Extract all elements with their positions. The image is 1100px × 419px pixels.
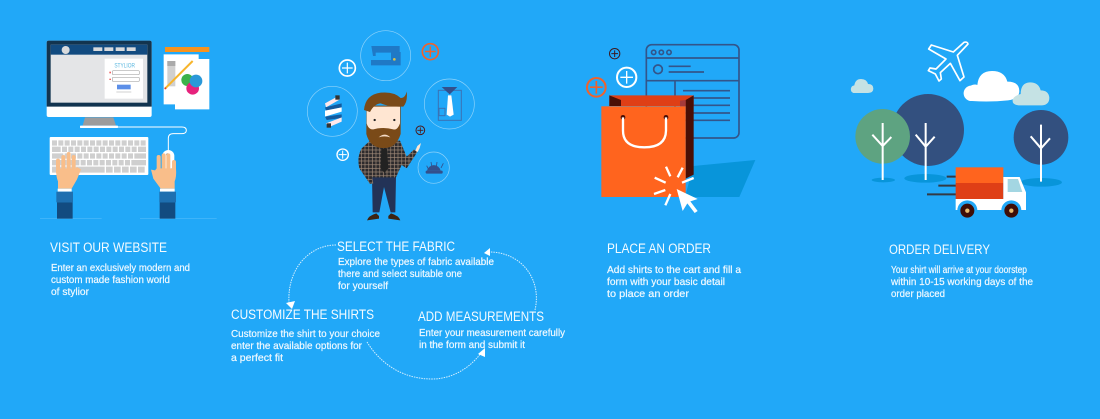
- icon: right hand and sleeve: [151, 155, 176, 219]
- floor lines: [40, 218, 217, 220]
- icon: plus white small: [337, 149, 348, 160]
- text block: visit our website: VISIT OUR WEBSITE: [50, 240, 167, 255]
- icon: tree green: [855, 109, 910, 182]
- text block: customize the shirts: a perfect fit: [231, 352, 283, 364]
- icon: shopping bag: [601, 95, 694, 197]
- text block: select the fabric: there and select suitable one: [338, 268, 462, 280]
- text block: add measurements: ADD MEASUREMENTS: [418, 309, 544, 324]
- text block: add measurements: in the form and submit it: [419, 339, 525, 351]
- icon: computer mouse: [162, 150, 174, 169]
- icon: keyboard: [50, 137, 148, 175]
- text block: customize the shirts: [231, 307, 380, 364]
- text block: place an order: Add shirts to the cart and fill a: [607, 264, 741, 276]
- character: bearded man: [358, 91, 421, 220]
- icon: pin cushion: [418, 152, 449, 183]
- text block: order delivery: within 10-15 working days of the: [890, 276, 1033, 288]
- icon: delivery truck: [927, 167, 1026, 218]
- text block: customize the shirts: enter the available options for: [231, 340, 362, 352]
- illustration: delivery truck and landscape: [851, 42, 1068, 218]
- text block: add measurements: [418, 309, 566, 351]
- text block: customize the shirts: Customize the shirt to your choice: [231, 328, 380, 340]
- illustration: tailor with fabric icons: [307, 31, 474, 220]
- text block: select the fabric: for yourself: [338, 280, 388, 292]
- icon: sewing machine: [361, 31, 411, 81]
- icon: tree dark right: [1014, 110, 1068, 187]
- icon: plus orange: [422, 44, 438, 60]
- icon: click burst: [654, 167, 694, 205]
- icon: plus dark: [416, 126, 425, 135]
- icon: plus white large: [339, 60, 355, 76]
- arrow: fabric to customize: [286, 245, 336, 309]
- illustration: computer and hands: [40, 41, 217, 219]
- text block: select the fabric: SELECT THE FABRIC: [337, 239, 455, 254]
- icon: left hand and sleeve: [56, 154, 81, 219]
- text block: customize the shirts: CUSTOMIZE THE SHIRTS: [231, 307, 374, 322]
- text block: add measurements: Enter your measurement carefully: [419, 327, 566, 339]
- icon: browser window: [646, 45, 739, 138]
- text block: visit our website: [50, 240, 190, 298]
- icon: monitor: STYLIOR: [114, 62, 135, 69]
- text block: place an order: [607, 241, 741, 300]
- text block: visit our website: Enter an exclusively modern and: [51, 262, 190, 274]
- text block: order delivery: ORDER DELIVERY: [889, 242, 990, 257]
- text block: select the fabric: Explore the types of fabric available: [338, 256, 494, 268]
- icon: cursor arrow: [677, 189, 698, 213]
- text block: order delivery: Your shirt will arrive at your doorstep: [891, 264, 1027, 276]
- bag shadow: [685, 160, 755, 197]
- text block: order delivery: [889, 242, 1033, 300]
- icon: white cloud: [964, 71, 1019, 102]
- icon: monitor: [47, 41, 152, 128]
- icon: design papers with pencil and colour circles: [164, 47, 209, 109]
- text block: select the fabric: [337, 239, 494, 292]
- icon: small cloud left: [851, 79, 873, 93]
- text block: visit our website: of stylior: [51, 286, 89, 298]
- text block: place an order: PLACE AN ORDER: [607, 241, 711, 256]
- icon: tree dark centre: [892, 94, 964, 183]
- mouse cable: [118, 127, 186, 151]
- text block: visit our website: custom made fashion world: [51, 274, 170, 286]
- text block: place an order: form with your basic detail: [607, 276, 725, 288]
- illustration: shopping bag and web form: [587, 45, 755, 213]
- icon: plus dark: [609, 48, 620, 59]
- arrow: customize to measurements: [367, 342, 485, 379]
- icon: plus orange: [587, 78, 606, 97]
- icon: plus white: [617, 68, 636, 87]
- icon: shirt and tie: [424, 79, 474, 129]
- icon: measuring ribbon: [307, 86, 357, 136]
- icon: airplane: [928, 42, 968, 81]
- arrow: measurements to fabric: [484, 248, 536, 310]
- icon: pale cloud: [1013, 82, 1049, 105]
- text block: order delivery: order placed: [891, 288, 945, 300]
- text block: place an order: to place an order: [607, 288, 690, 300]
